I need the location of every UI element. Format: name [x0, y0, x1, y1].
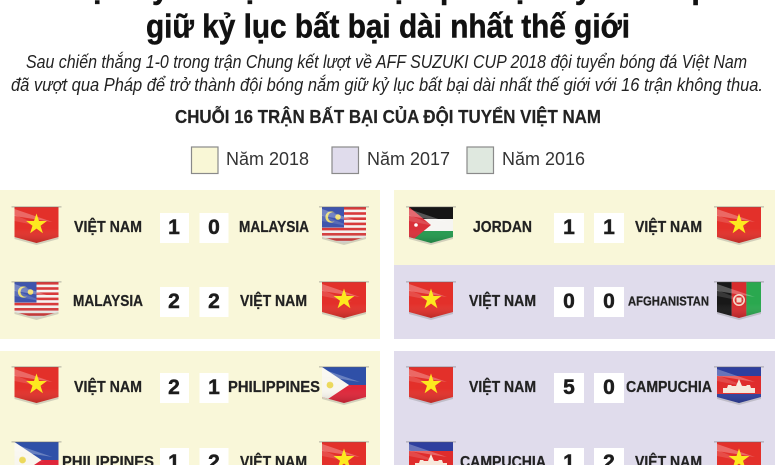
- match: Malaysia 2-2 Việt Nam: [12, 281, 369, 320]
- match: Jordan 1-1 Việt Nam: [406, 206, 764, 245]
- match: Việt Nam 2-1 Philippines: PHILIPPINES: [228, 379, 320, 396]
- match: Việt Nam 5-0 Campuchia: VIỆT NAM: [469, 377, 536, 396]
- panel: bottom right 2017: [394, 351, 775, 465]
- legend: [192, 147, 585, 174]
- flag: Malaysia: [12, 281, 62, 320]
- match: Philippines 1-2 Việt Nam: [12, 441, 369, 465]
- panel: top right 2018: [394, 190, 775, 265]
- legend item: 2017: [332, 147, 450, 174]
- panel: bottom left 2018: [0, 351, 380, 465]
- match: Việt Nam 2-1 Philippines: 1: [208, 376, 220, 399]
- flag: Campuchia: [406, 441, 456, 465]
- legend item: 2017: Năm 2017: [367, 149, 450, 169]
- match: Việt Nam 1-0 Malaysia: VIỆT NAM: [74, 217, 142, 236]
- match: Jordan 1-1 Việt Nam: VIỆT NAM: [635, 217, 702, 236]
- panel: top right 2017: [394, 265, 775, 339]
- match: Malaysia 2-2 Việt Nam: MALAYSIA: [73, 293, 143, 310]
- panel: top left 2018: [0, 190, 380, 339]
- flag: Campuchia: [714, 366, 764, 405]
- flag: Philippines: [12, 441, 62, 465]
- match: Jordan 1-1 Việt Nam: 1: [603, 216, 615, 239]
- flag: Việt Nam: [406, 366, 456, 405]
- match: Campuchia 1-2 Việt Nam: [406, 441, 764, 465]
- flag: Philippines: [319, 366, 369, 405]
- match: Malaysia 2-2 Việt Nam: VIỆT NAM: [240, 291, 307, 310]
- flag: Việt Nam: [714, 206, 764, 245]
- legend item: 2016: [467, 147, 585, 174]
- match: Malaysia 2-2 Việt Nam: 2: [168, 290, 180, 313]
- match: Việt Nam 5-0 Campuchia: [406, 366, 764, 405]
- flag: Afghanistan: [714, 281, 764, 320]
- match: Việt Nam 5-0 Campuchia: CAMPUCHIA: [626, 379, 712, 396]
- title: giữ kỷ lục bất bại dài nhất thế giới: [146, 8, 630, 44]
- match: Việt Nam 0-0 Afghanistan: 0: [563, 290, 575, 313]
- flag: Việt Nam: [12, 206, 62, 245]
- title: [66, 0, 710, 44]
- match: Việt Nam 5-0 Campuchia: 0: [603, 376, 615, 399]
- flag: Malaysia: [319, 206, 369, 245]
- flag: Việt Nam: [406, 281, 456, 320]
- match: Việt Nam 1-0 Malaysia: MALAYSIA: [239, 219, 309, 236]
- match: Việt Nam 2-1 Philippines: [12, 366, 369, 405]
- chart heading: CHUỖI 16 TRẬN BẤT BẠI CỦA ĐỘI TUYỂN VIỆT NAM: [175, 106, 601, 127]
- match: Việt Nam 1-0 Malaysia: 0: [208, 216, 220, 239]
- flag: Việt Nam: [319, 281, 369, 320]
- match: Việt Nam 0-0 Afghanistan: [406, 281, 764, 320]
- flag: Jordan: [406, 206, 456, 245]
- match: Việt Nam 2-1 Philippines: 2: [168, 376, 180, 399]
- legend item: 2018: [192, 147, 309, 174]
- flag: Việt Nam: [319, 441, 369, 465]
- flag: Việt Nam: [714, 441, 764, 465]
- match: Jordan 1-1 Việt Nam: 1: [563, 216, 575, 239]
- match: Việt Nam 0-0 Afghanistan: 0: [603, 290, 615, 313]
- intro text: [11, 52, 763, 95]
- legend item: 2016: Năm 2016: [502, 149, 585, 169]
- match: Việt Nam 1-0 Malaysia: [12, 206, 369, 245]
- match: Jordan 1-1 Việt Nam: JORDAN: [473, 219, 532, 236]
- legend item: 2018: Năm 2018: [226, 149, 309, 169]
- match: Việt Nam 0-0 Afghanistan: AFGHANISTAN: [628, 294, 709, 308]
- match: Việt Nam 5-0 Campuchia: 5: [563, 376, 575, 399]
- match: Việt Nam 1-0 Malaysia: 1: [168, 216, 180, 239]
- match: Malaysia 2-2 Việt Nam: 2: [208, 290, 220, 313]
- match: Việt Nam 0-0 Afghanistan: VIỆT NAM: [469, 291, 536, 310]
- flag: Việt Nam: [12, 366, 62, 405]
- match: Việt Nam 2-1 Philippines: VIỆT NAM: [74, 377, 142, 396]
